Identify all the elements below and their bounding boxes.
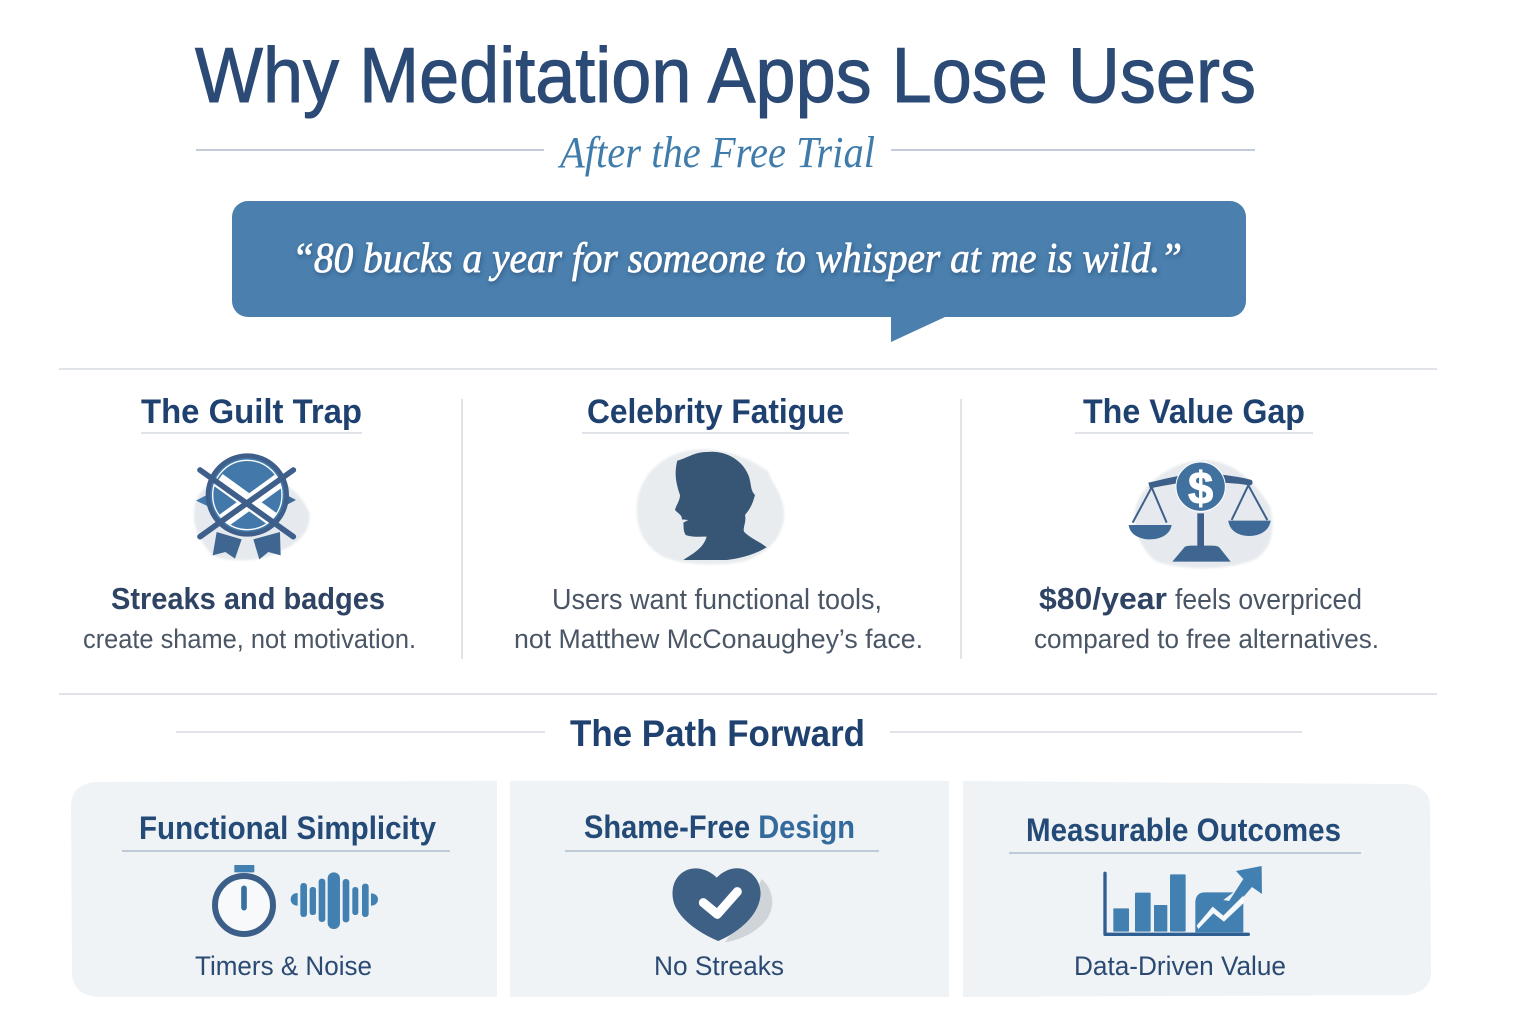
label: timers and noise: Timers & Noise — [195, 951, 372, 981]
heading: the path forward: The Path Forward — [570, 713, 865, 754]
icon: bar chart with rising arrow — [1105, 866, 1262, 934]
icon: scales with dollar coin: $ — [1188, 462, 1213, 513]
text: functional tools: Users want functional tools, — [552, 584, 882, 616]
heading: measurable outcomes: Measurable Outcomes — [1026, 812, 1341, 848]
icon: crossed-out badge — [194, 456, 310, 560]
heading: the guilt trap: The Guilt Trap — [141, 393, 362, 431]
text: overpriced: $80/year — [1039, 581, 1167, 616]
panel: shame-free design — [510, 781, 949, 997]
icon: heart with check — [672, 868, 772, 942]
panel: celebrity fatigue — [514, 393, 923, 654]
panel: functional simplicity — [71, 781, 497, 997]
icon: scales with dollar coin — [1129, 460, 1272, 568]
heading: functional simplicity: Functional Simplicity — [139, 810, 436, 846]
subtitle: After the Free Trial — [557, 128, 875, 177]
icon: celebrity silhouette — [637, 449, 784, 564]
heading: celebrity fatigue: Celebrity Fatigue — [587, 393, 844, 431]
quote speech bubble — [232, 201, 1246, 342]
text: functional tools — [514, 584, 923, 654]
text: streaks and badges: create shame, not motivation. — [83, 624, 416, 654]
panel: the value gap — [1034, 393, 1379, 654]
heading: the value gap: The Value Gap — [1083, 393, 1305, 431]
text: overpriced — [1034, 581, 1379, 654]
label: data-driven value: Data-Driven Value — [1074, 951, 1286, 981]
text: overpriced: compared to free alternatives. — [1034, 624, 1379, 654]
text: streaks and badges — [83, 581, 416, 654]
text: streaks and badges: Streaks and badges — [111, 581, 385, 616]
heading: shame-free design: Shame-Free Design — [584, 809, 855, 845]
label: no streaks: No Streaks — [654, 951, 784, 981]
text: overpriced: feels overpriced — [1175, 584, 1362, 616]
panel: measurable outcomes — [963, 781, 1431, 997]
icon: timer and sound wave — [215, 865, 378, 934]
panel: the guilt trap — [83, 393, 416, 654]
quote speech bubble: “80 bucks a year for someone to whisper at me is wild.” — [292, 236, 1182, 282]
title: Why Meditation Apps Lose Users — [195, 31, 1256, 119]
text: functional tools: not Matthew McConaughey’s face. — [514, 624, 923, 654]
